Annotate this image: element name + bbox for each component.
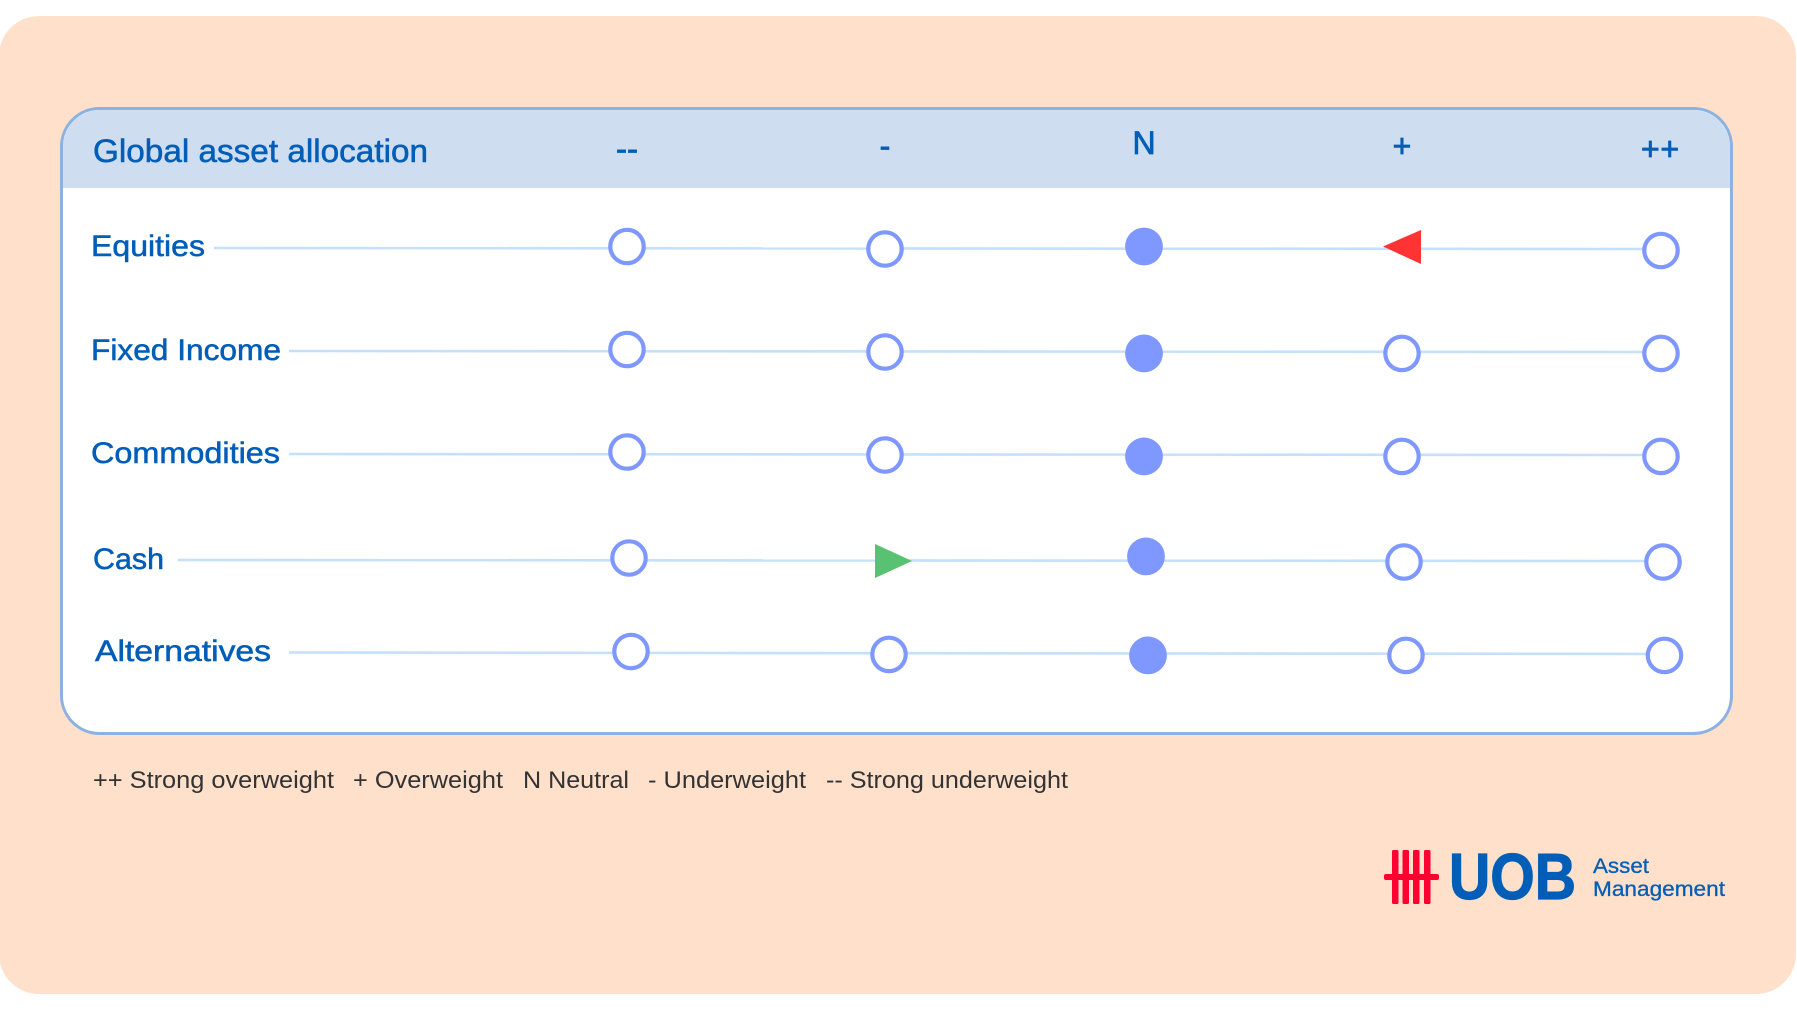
- table header band: [63, 110, 1730, 188]
- legend: ++ Strong overweight: [93, 767, 334, 794]
- row: Alternatives: Alternatives: [95, 635, 271, 668]
- legend: -- Strong underweight: [826, 767, 1068, 794]
- legend: - Underweight: [648, 767, 806, 794]
- row: Cash: [93, 538, 1680, 579]
- column header: neutral: N: [1132, 125, 1156, 161]
- row: Fixed Income: [91, 333, 1678, 372]
- logo subtitle: [1593, 855, 1725, 901]
- icon: UOB red mark: [1384, 850, 1439, 904]
- logo wordmark: UOB: [1449, 840, 1576, 913]
- legend: N Neutral: [523, 767, 629, 794]
- panel: allocation table: [62, 108, 1732, 734]
- row: Equities: [91, 228, 1678, 267]
- legend: + Overweight: [353, 767, 503, 794]
- icon: green right triangle: [875, 544, 912, 578]
- column header: strong underweight: --: [616, 131, 638, 167]
- logo: UOB Asset Management: [1384, 840, 1725, 913]
- legend: [93, 767, 1068, 794]
- column header: strong overweight: ++: [1641, 131, 1679, 167]
- heading: Global asset allocation: Global asset allocation: [93, 133, 428, 169]
- logo subtitle: Management: [1593, 878, 1725, 901]
- row: Fixed Income: Fixed Income: [91, 334, 281, 367]
- column header: overweight: +: [1393, 128, 1411, 164]
- row: Commodities: Commodities: [91, 437, 280, 470]
- row: Alternatives: [95, 635, 1681, 674]
- logo subtitle: Asset: [1593, 855, 1649, 878]
- row: Cash: Cash: [93, 543, 164, 576]
- row: Equities: Equities: [91, 230, 205, 263]
- icon: red left triangle: [1383, 230, 1421, 264]
- row: Commodities: [91, 435, 1678, 475]
- column header: underweight: -: [880, 128, 890, 164]
